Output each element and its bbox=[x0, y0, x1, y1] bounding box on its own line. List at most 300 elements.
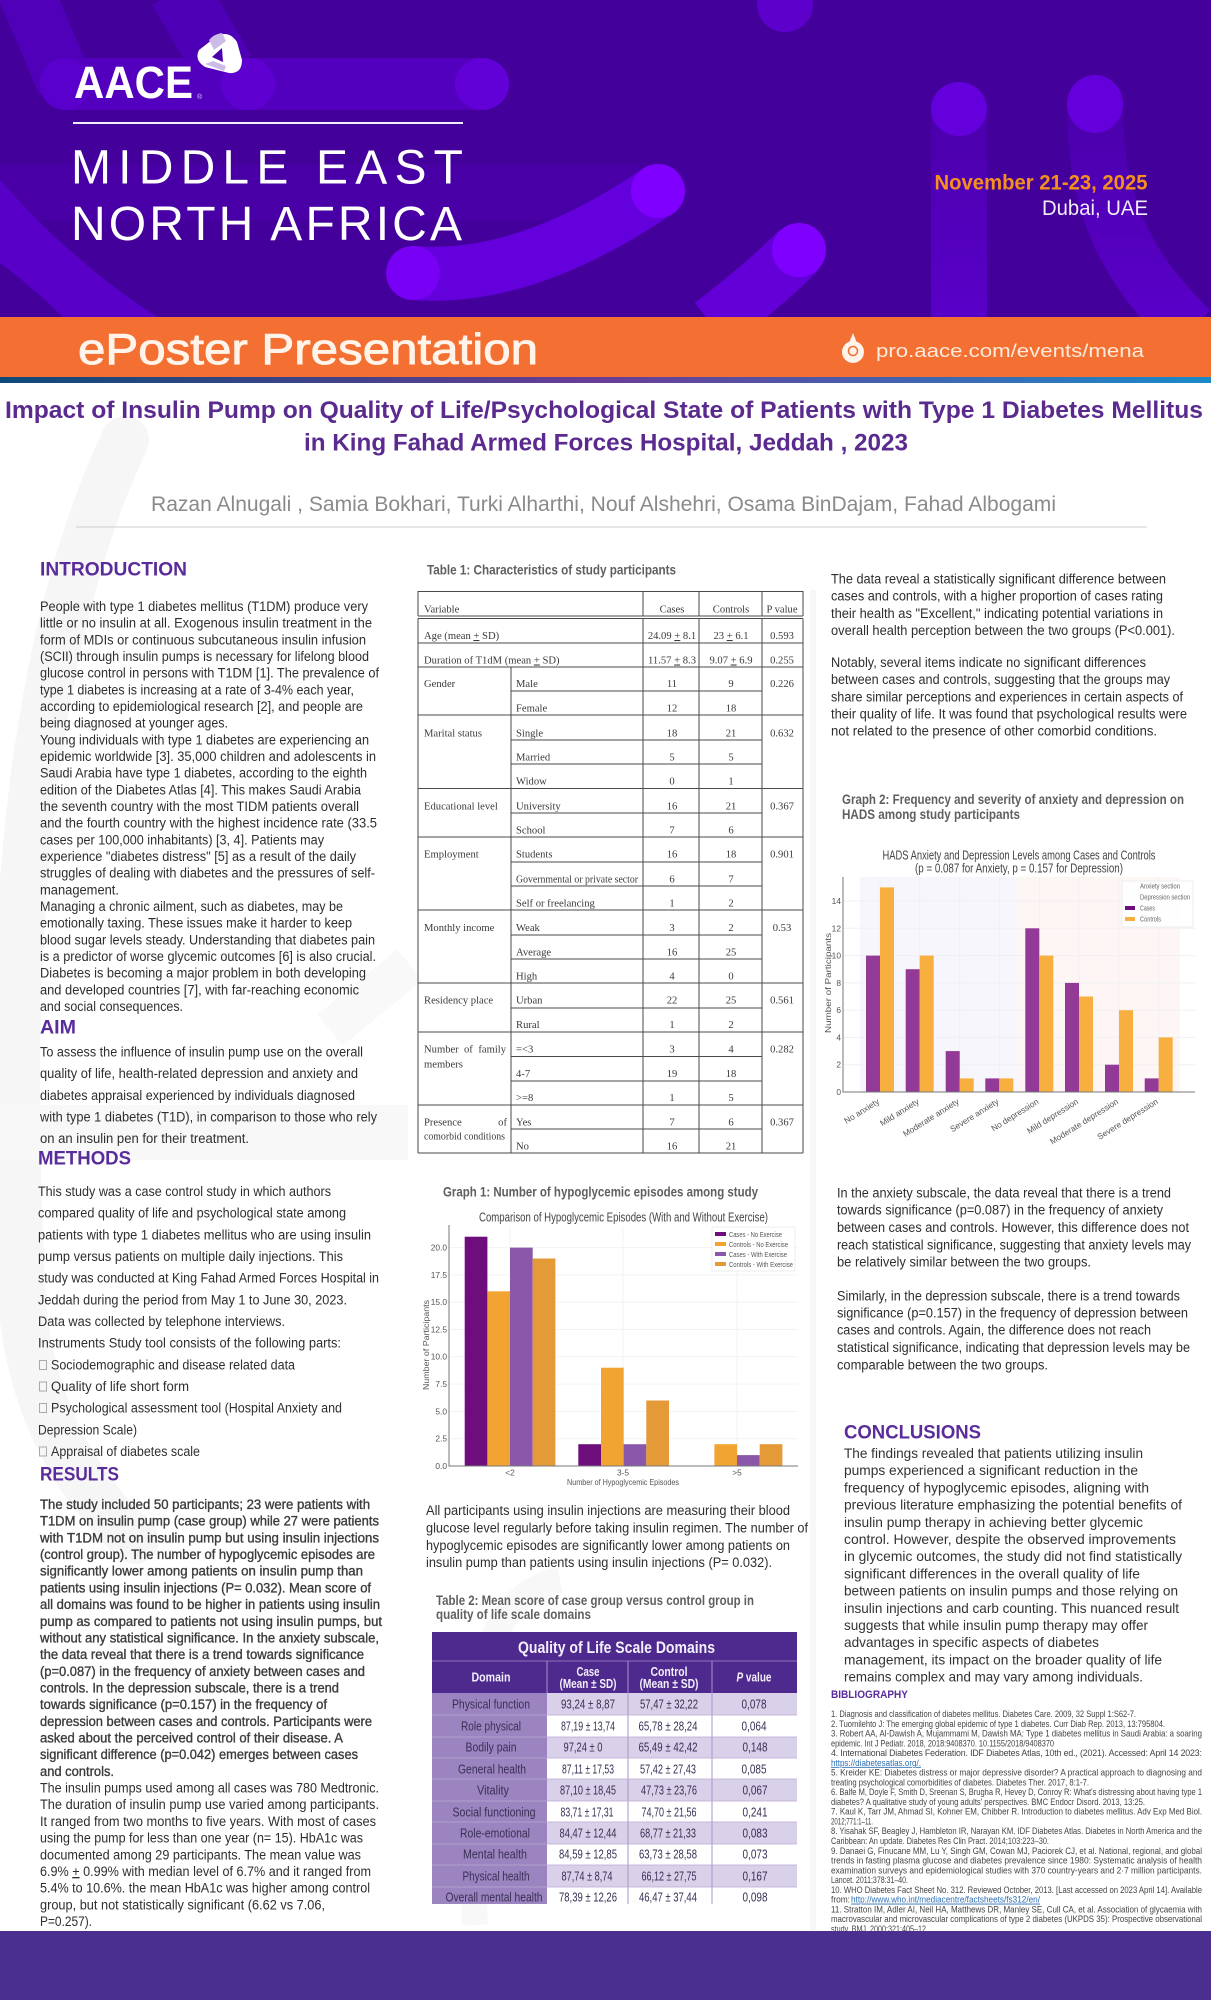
table 1: characteristics of participants: Controls bbox=[713, 604, 749, 616]
text block: references: epidemic. Int J Pediatr. 2018, 2018:9408370. 10.1155/2018/9408370 bbox=[831, 1738, 1054, 1748]
text block: references: from: bbox=[831, 1895, 850, 1905]
table 2: quality of life domains: 66,12 ± 27,75 bbox=[642, 1868, 696, 1884]
table 2: quality of life domains: (Mean ± SD) bbox=[560, 1677, 616, 1691]
table 1: characteristics of participants: 16 bbox=[667, 802, 677, 812]
text block: methods: compared quality of life and psychological state among bbox=[38, 1206, 346, 1221]
text block: results: documented among 29 participants. The mean value was bbox=[40, 1847, 361, 1862]
heading: table 1: Table 1: Characteristics of study participants bbox=[427, 562, 676, 578]
logo: AACE: ® bbox=[197, 93, 203, 101]
bar chart: hypoglycemic episodes: Comparison of Hypoglycemic Episodes (With and Without Exercise) bbox=[479, 1210, 768, 1224]
orange ePoster band: ePoster Presentation bbox=[78, 325, 538, 374]
table 2: quality of life domains: Mental health bbox=[463, 1846, 527, 1862]
background watermark bbox=[0, 440, 816, 1930]
table 1: characteristics of participants: Marital status bbox=[424, 728, 482, 740]
table 1: characteristics of participants: >=8 bbox=[516, 1093, 533, 1104]
table 1: characteristics of participants: Students bbox=[516, 850, 552, 860]
table 1: characteristics of participants: High bbox=[516, 972, 538, 982]
text block: references: http://www.who.int/mediacentre/factsheets/fs312/en/ bbox=[851, 1895, 1041, 1905]
icon: website globe bbox=[842, 333, 864, 363]
table 1: characteristics of participants: 6 bbox=[669, 874, 675, 886]
table 2: quality of life domains: Physical health bbox=[462, 1868, 530, 1884]
text block: conclusions: management, its impact on the broader quality of life bbox=[844, 1652, 1162, 1667]
bar chart: HADS anxiety and depression: Severe anxiety bbox=[948, 1096, 1001, 1134]
text block: references: trends in fasting plasma glucose and diabetes prevalence since 1980: Systematic analysis of health bbox=[831, 1856, 1202, 1866]
text block: conclusions: control. However, despite the observed improvements bbox=[844, 1532, 1176, 1547]
table 1: characteristics of participants: 0.226 bbox=[770, 679, 794, 690]
heading: results: RESULTS bbox=[40, 1464, 119, 1486]
table 1: characteristics of participants: 7 bbox=[669, 1118, 675, 1128]
text block: introduction: little or no insulin at all. Exogenous insulin treatment in the bbox=[40, 616, 372, 631]
table 1: characteristics of participants: =<3 bbox=[516, 1044, 533, 1056]
bar chart: hypoglycemic episodes bbox=[421, 1210, 798, 1487]
table 1: characteristics of participants: Average bbox=[516, 948, 551, 958]
table 2: quality of life domains: Control bbox=[650, 1665, 688, 1679]
table 2: quality of life domains: 83,71 ± 17,31 bbox=[560, 1804, 614, 1820]
heading: aim: AIM bbox=[40, 1018, 76, 1038]
table 2: quality of life domains: 0,064 bbox=[742, 1718, 766, 1734]
chart legend: Controls bbox=[1140, 914, 1161, 924]
text block: introduction: blood sugar levels steady. Understanding that diabetes pain bbox=[40, 932, 375, 947]
website url: pro.aace.com/events/mena bbox=[876, 341, 1145, 361]
bar chart: HADS anxiety and depression: 10 bbox=[832, 951, 841, 961]
table 2: quality of life domains: 87,19 ± 13,74 bbox=[561, 1718, 615, 1734]
table 1: characteristics of participants: 6 bbox=[728, 826, 734, 836]
table 1: characteristics of participants: 0 bbox=[669, 776, 675, 788]
bar chart: hypoglycemic episodes: 10.0 bbox=[431, 1352, 447, 1362]
table 1: characteristics of participants: School bbox=[516, 826, 545, 836]
text block: anxiety and depression findings: reach statistical significance, suggesting that anxiety levels may bbox=[837, 1238, 1191, 1252]
table 1: characteristics of participants: 4 bbox=[669, 972, 675, 982]
poster title bbox=[5, 397, 1203, 456]
chart legend: Depression section bbox=[1140, 892, 1190, 902]
table 2: quality of life domains: 0,167 bbox=[742, 1868, 768, 1884]
text block: introduction: Managing a chronic ailment, such as diabetes, may be bbox=[40, 899, 343, 914]
text block: conclusions: suggests that while insulin pump therapy may offer bbox=[844, 1618, 1148, 1633]
orange ePoster band bbox=[0, 317, 1211, 377]
text block: results: without any statistical significance. In the anxiety subscale, bbox=[39, 1630, 379, 1645]
bar chart: hypoglycemic episodes: 20.0 bbox=[431, 1242, 447, 1252]
table 1: characteristics of participants: Single bbox=[516, 728, 543, 740]
table 1: characteristics of participants: of bbox=[464, 1044, 473, 1056]
text block: hypoglycemia finding: glucose level regularly before taking insulin regimen. The number of bbox=[426, 1520, 808, 1536]
text block: introduction: and developed countries [7], with far-reaching economic bbox=[40, 982, 359, 997]
text block: hypoglycemia finding: hypoglycemic episodes are significantly lower among patients on bbox=[426, 1538, 790, 1553]
table 2: quality of life domains: Social functioning bbox=[452, 1804, 536, 1820]
bar chart: hypoglycemic episodes: 7.5 bbox=[435, 1379, 447, 1389]
bar chart: hypoglycemic episodes: Number of Participants bbox=[421, 1300, 431, 1390]
event date and place: November 21-23, 2025 bbox=[934, 170, 1148, 194]
table 1: characteristics of participants: 5 bbox=[728, 752, 734, 764]
text block: introduction: type 1 diabetes is increasing at a rate of 3-4% each year, bbox=[40, 682, 354, 697]
chart legend: Cases bbox=[1140, 904, 1155, 912]
table 1: characteristics of participants: 7 bbox=[728, 874, 734, 886]
table 1: characteristics of participants: 0 bbox=[728, 972, 734, 982]
divider under authors bbox=[76, 526, 1147, 528]
table 1: characteristics of participants: family bbox=[478, 1044, 507, 1056]
text block: results: The insulin pumps used among all cases was 780 Medtronic. bbox=[40, 1781, 379, 1796]
poster title: Impact of Insulin Pump on Quality of Life/Psychological State of Patients with Type 1 Diabetes Mellitus bbox=[5, 397, 1203, 424]
table 1: characteristics of participants: 0.901 bbox=[770, 850, 794, 860]
text block: anxiety and depression findings: In the anxiety subscale, the data reveal that there is a trend bbox=[837, 1186, 1171, 1200]
text block: introduction: Young individuals with type 1 diabetes are experiencing an bbox=[40, 732, 369, 747]
table 1: characteristics of participants: 18 bbox=[726, 850, 736, 860]
table 1: characteristics of participants: No bbox=[516, 1142, 529, 1152]
table 2: quality of life domains: Domain bbox=[472, 1670, 510, 1684]
heading: table 2: Table 2: Mean score of case group versus control group in bbox=[436, 1593, 754, 1608]
text block: results: T1DM on insulin pump (case group) while 27 were patients bbox=[40, 1514, 379, 1529]
text block: results: towards significance (p=0.157) in the frequency of bbox=[40, 1697, 327, 1712]
text block: results: (p=0.087) in the frequency of anxiety between cases and bbox=[40, 1664, 365, 1679]
table 2: quality of life domains: 65,78 ± 28,24 bbox=[638, 1718, 698, 1734]
table 2: quality of life domains: 65,49 ± 42,42 bbox=[638, 1740, 698, 1754]
text block: aim: quality of life, health-related depression and anxiety and bbox=[40, 1066, 358, 1081]
text block: introduction: and social consequences. bbox=[40, 999, 183, 1014]
table 1: characteristics of participants: Monthly income bbox=[424, 923, 495, 934]
table 1: characteristics of participants: 21 bbox=[726, 728, 736, 740]
heading: graph 2 bbox=[842, 792, 1184, 822]
logo: AACE bbox=[74, 33, 242, 108]
text block: overall health findings: share similar perceptions and experiences in certain aspects of bbox=[831, 690, 1183, 704]
table 1: characteristics of participants: 5 bbox=[669, 752, 675, 764]
table 1: characteristics of participants: Married bbox=[516, 752, 551, 764]
text block: aim: with type 1 diabetes (T1D), in comparison to those who rely bbox=[39, 1110, 377, 1124]
table 1: characteristics of participants: Female bbox=[516, 704, 547, 714]
event date and place: Dubai, UAE bbox=[1042, 196, 1148, 220]
bar chart: hypoglycemic episodes: 5.0 bbox=[435, 1406, 447, 1416]
table 2: quality of life domains: 46,47 ± 37,44 bbox=[639, 1890, 697, 1904]
chart legend: Anxiety section bbox=[1140, 882, 1180, 890]
poster title: in King Fahad Armed Forces Hospital, Jeddah , 2023 bbox=[304, 430, 908, 456]
text block: results: with T1DM not on insulin pump but using insulin injections bbox=[39, 1530, 379, 1545]
gradient strip bbox=[0, 377, 1211, 383]
table 1: characteristics of participants: Educational level bbox=[424, 802, 498, 812]
table 2: quality of life domains: 78,39 ± 12,26 bbox=[559, 1890, 617, 1904]
table 2: quality of life domains: 84,59 ± 12,85 bbox=[559, 1846, 617, 1862]
table 2: quality of life domains: 0,085 bbox=[742, 1762, 766, 1776]
text block: introduction: epidemic worldwide [3]. 35,000 children and adolescents in bbox=[40, 749, 376, 764]
bar chart: hypoglycemic episodes: 15.0 bbox=[431, 1297, 447, 1307]
bar chart: HADS anxiety and depression: Number of Participants bbox=[823, 933, 833, 1033]
text block: introduction: the seventh country with the most TIDM patients overall bbox=[40, 799, 359, 814]
bar chart: HADS anxiety and depression: Moderate anxiety bbox=[901, 1096, 961, 1139]
text block: results: patients using insulin injections (P= 0.032). Mean score of bbox=[40, 1580, 371, 1595]
table 1: characteristics of participants: of bbox=[498, 1118, 507, 1128]
table 1: characteristics of participants: 7 bbox=[669, 826, 675, 836]
table 2: quality of life domains: 74,70 ± 21,56 bbox=[642, 1804, 696, 1820]
text block: results: using the pump for less than one year (n= 15). HbA1c was bbox=[40, 1831, 363, 1846]
table 1: characteristics of participants: 18 bbox=[667, 728, 677, 740]
text block: references: treating psychological comorbidities of diabetes. Diabetes Ther. 2017, 8:1-7. bbox=[831, 1777, 1089, 1787]
text block: introduction: struggles of dealing with diabetes and the pressures of self- bbox=[40, 866, 375, 881]
text block: conclusions: pumps experienced a significant reduction in the bbox=[844, 1463, 1138, 1478]
text block: overall health findings: not related to the presence of other comorbid conditions. bbox=[831, 724, 1157, 738]
table 1: characteristics of participants: 1 bbox=[669, 1093, 675, 1104]
table 2: quality of life domains: 87,74 ± 8,74 bbox=[562, 1868, 612, 1884]
table 2: quality of life domains: 57,42 ± 27,43 bbox=[640, 1762, 696, 1776]
table 2: quality of life domains: 97,24 ± 0 bbox=[564, 1740, 602, 1754]
text block: references: 1. Diagnosis and classification of diabetes mellitus. Diabetes Care. 2009, 32 Suppl 1:S62-7. bbox=[831, 1709, 1136, 1719]
text block: introduction: experience "diabetes distress" [5] as a result of the daily bbox=[40, 849, 356, 864]
bar chart: HADS anxiety and depression: (p = 0.087 for Anxiety, p = 0.157 for Depression) bbox=[915, 862, 1123, 876]
table 2: quality of life domains: 0,098 bbox=[742, 1890, 768, 1904]
text block: methods: pump versus patients on multiple daily injections. This bbox=[38, 1249, 343, 1264]
text block: conclusions: previous literature emphasizing the potential benefits of bbox=[844, 1498, 1182, 1513]
text block: introduction: and the fourth country with the highest incidence rate (33.5 bbox=[40, 816, 377, 831]
bar chart: HADS anxiety and depression: Mild anxiety bbox=[878, 1096, 921, 1128]
footer band bbox=[0, 1931, 1211, 2000]
text block: anxiety and depression findings: be relatively similar between the two groups. bbox=[837, 1254, 1091, 1270]
chart legend: Controls - With Exercise bbox=[729, 1260, 793, 1269]
table 2: quality of life domains bbox=[432, 1632, 797, 1904]
text block: results: controls. In the depression subscale, there is a trend bbox=[40, 1680, 339, 1696]
text block: overall health findings: their health as "Excellent," indicating potential variations in bbox=[831, 606, 1163, 621]
table 1: characteristics of participants: 9.07 + 6.9 bbox=[709, 656, 753, 666]
table 1: characteristics of participants: 9 bbox=[728, 679, 734, 690]
table 1: characteristics of participants: 12 bbox=[667, 704, 677, 714]
text block: methods: Depression Scale) bbox=[38, 1422, 137, 1437]
text block: overall health findings bbox=[831, 572, 1187, 738]
heading: table 2 bbox=[436, 1593, 754, 1622]
table 2: quality of life domains: General health bbox=[458, 1762, 526, 1776]
text block: anxiety and depression findings: significance (p=0.157) in the frequency of depression between bbox=[837, 1306, 1188, 1320]
table 2: quality of life domains: Role-emotional bbox=[460, 1826, 530, 1840]
bar chart: HADS anxiety and depression: No anxiety bbox=[842, 1096, 882, 1126]
table 2: quality of life domains: Quality of Life Scale Domains bbox=[518, 1638, 715, 1657]
bar chart: HADS anxiety and depression: 4 bbox=[836, 1032, 841, 1042]
table 1: characteristics of participants: 0.593 bbox=[770, 631, 794, 642]
text block: results: depression between cases and controls. Participants were bbox=[40, 1714, 372, 1729]
chart legend bbox=[712, 1227, 795, 1271]
text block: results: asked about the perceived control of their disease. A bbox=[40, 1730, 343, 1746]
table 1: characteristics of participants: Gender bbox=[424, 679, 456, 690]
table 2: quality of life domains: 87,10 ± 18,45 bbox=[560, 1782, 616, 1798]
text block: overall health findings: Notably, several items indicate no significant differences bbox=[831, 655, 1146, 670]
table 2: quality of life domains: 0,078 bbox=[742, 1696, 766, 1712]
text block: methods: Instruments Study tool consists of the following parts: bbox=[38, 1336, 341, 1351]
table 2: quality of life domains: 63,73 ± 28,58 bbox=[639, 1846, 697, 1862]
table 1: characteristics of participants: 4-7 bbox=[516, 1069, 530, 1080]
table 1: characteristics of participants: 19 bbox=[667, 1069, 677, 1080]
text block: references: Lancet. 2011;378:31–40. bbox=[831, 1875, 908, 1885]
text block: results: significantly lower among patients on insulin pump than bbox=[40, 1564, 363, 1579]
table 1: characteristics of participants: 0.255 bbox=[770, 656, 794, 666]
text block: anxiety and depression findings: towards significance (p=0.087) in the frequency of anxiety bbox=[837, 1203, 1163, 1218]
text block: results: significant difference (p=0.042) emerges between cases bbox=[40, 1747, 358, 1762]
text block: methods: patients with type 1 diabetes mellitus who are using insulin bbox=[38, 1227, 371, 1242]
text block: conclusions: significant differences in the overall quality of life bbox=[844, 1566, 1140, 1581]
text block: introduction: cases per 100,000 inhabitants) [3, 4]. Patients may bbox=[40, 832, 324, 847]
table 2: quality of life domains: 47,73 ± 23,76 bbox=[641, 1782, 697, 1798]
table 1: characteristics of participants: Duration of T1dM (mean + SD) bbox=[424, 656, 560, 666]
table 2: quality of life domains: 0,083 bbox=[742, 1826, 768, 1840]
table 2: quality of life domains: 0,148 bbox=[742, 1740, 768, 1754]
divider line under logo bbox=[73, 122, 463, 124]
table 1: characteristics of participants: 1 bbox=[728, 776, 734, 788]
text block: methods: Sociodemographic and disease related data bbox=[51, 1357, 296, 1372]
text block: introduction: Diabetes is becoming a major problem in both developing bbox=[40, 966, 366, 981]
text block: introduction: emotionally taxing. These issues make it harder to keep bbox=[40, 916, 352, 931]
text block: references: 2. Tuomilehto J: The emerging global epidemic of type 1 diabetes. Curr Diab Rep. 2013, 13:795804. bbox=[831, 1719, 1165, 1729]
table 1: characteristics of participants: 1 bbox=[669, 1020, 675, 1031]
text block: conclusions: frequency of hypoglycemic episodes, aligning with bbox=[844, 1480, 1149, 1495]
table 1: characteristics of participants: Age (mean + SD) bbox=[424, 631, 500, 642]
text block: anxiety and depression findings: between cases and controls. However, this difference does not bbox=[837, 1220, 1189, 1235]
table 1: characteristics of participants: 6 bbox=[728, 1118, 734, 1128]
table 1: characteristics of participants: 21 bbox=[726, 802, 736, 812]
text block: aim: diabetes appraisal experienced by individuals diagnosed bbox=[40, 1088, 355, 1103]
table 2: quality of life domains: Case bbox=[576, 1665, 600, 1679]
text block: methods: study was conducted at King Fahad Armed Forces Hospital in bbox=[38, 1271, 379, 1286]
table 1: characteristics of participants: 18 bbox=[726, 1069, 736, 1080]
text block: references: diabetes? A qualitative study of young adults' perspectives. BMC Endocr Disord. 2013, 13:25. bbox=[831, 1797, 1145, 1807]
bar chart: hypoglycemic episodes: 2.5 bbox=[435, 1434, 447, 1444]
text block: results: The duration of insulin pump use varied among participants. bbox=[40, 1797, 379, 1812]
table 2: quality of life domains: 0,241 bbox=[742, 1804, 768, 1820]
event name bbox=[71, 142, 463, 251]
table 1: characteristics of participants: 3 bbox=[669, 1044, 675, 1056]
table 1: characteristics of participants: 3 bbox=[669, 923, 675, 934]
table 2: quality of life domains: Physical function bbox=[452, 1696, 530, 1712]
table 1: characteristics of participants: 2 bbox=[728, 898, 734, 910]
bar chart: HADS anxiety and depression: 0 bbox=[836, 1087, 841, 1097]
table 1: characteristics of participants: Yes bbox=[516, 1118, 531, 1128]
table 1: characteristics of participants: 25 bbox=[726, 948, 736, 958]
text block: overall health findings: cases and controls, with a higher proportion of cases rating bbox=[831, 589, 1163, 604]
text block: overall health findings: their quality of life. It was found that psychological results were bbox=[831, 706, 1187, 722]
bar chart: HADS anxiety and depression: 2 bbox=[836, 1060, 841, 1070]
table 1: characteristics of participants: Male bbox=[516, 679, 538, 690]
table 1: characteristics of participants: 22 bbox=[667, 996, 677, 1006]
text block: references: 4. International Diabetes Federation. IDF Diabetes Atlas, 10th ed., (2021). Accessed: April 14 2023: bbox=[831, 1748, 1202, 1758]
text block: introduction: form of MDIs or continuous subcutaneous insulin infusion bbox=[40, 632, 366, 647]
text block: anxiety and depression findings: cases and controls. Again, the difference does not reach bbox=[837, 1322, 1151, 1338]
bar chart: hypoglycemic episodes: 0.0 bbox=[435, 1461, 447, 1471]
text block: conclusions: The findings revealed that patients utilizing insulin bbox=[844, 1446, 1143, 1461]
table 1: characteristics of participants: Rural bbox=[516, 1020, 540, 1031]
event date and place bbox=[934, 170, 1148, 220]
text block: overall health findings: The data reveal a statistically significant difference between bbox=[831, 572, 1166, 586]
text block: results: It ranged from two months to five years. With most of cases bbox=[40, 1814, 376, 1829]
bar chart: HADS anxiety and depression: Mild depression bbox=[1025, 1096, 1080, 1136]
table 2: quality of life domains: P value bbox=[736, 1670, 772, 1684]
table 1: characteristics of participants: Urban bbox=[516, 996, 543, 1006]
bar chart: hypoglycemic episodes: >5 bbox=[732, 1468, 742, 1478]
table 1: characteristics of participants: 0.632 bbox=[770, 728, 794, 740]
text block: conclusions: between patients on insulin pumps and those relying on bbox=[844, 1584, 1178, 1599]
text block: introduction: according to epidemiological research [2], and people are bbox=[40, 699, 363, 714]
text block: results: P=0.257). bbox=[40, 1914, 92, 1929]
text block: conclusions: insulin injections and carb counting. This nuanced result bbox=[844, 1601, 1179, 1616]
table 1: characteristics of participants: 21 bbox=[726, 1142, 736, 1152]
table 2: quality of life domains: 0,067 bbox=[742, 1782, 768, 1798]
text block: anxiety and depression findings bbox=[837, 1186, 1191, 1372]
heading: methods: METHODS bbox=[38, 1148, 131, 1170]
table 1: characteristics of participants: Self or freelancing bbox=[516, 898, 596, 910]
text block: results: and controls. bbox=[40, 1764, 114, 1779]
text block: introduction bbox=[40, 599, 379, 1014]
text block: references: study. BMJ. 2000;321:405–12. bbox=[831, 1924, 928, 1934]
text block: hypoglycemia finding: All participants using insulin injections are measuring their blood bbox=[426, 1503, 790, 1518]
chart legend bbox=[1122, 881, 1193, 927]
text block: hypoglycemia finding: insulin pump than patients using insulin injections (P= 0.032). bbox=[426, 1555, 772, 1570]
text block: results: 6.9% + 0.99% with median level of 6.7% and it ranged from bbox=[40, 1864, 371, 1879]
text block: conclusions: advantages in specific aspects of diabetes bbox=[844, 1635, 1099, 1650]
text block: results: all domains was found to be higher in patients using insulin bbox=[40, 1597, 380, 1612]
text block: results: The study included 50 participants; 23 were patients with bbox=[40, 1497, 370, 1512]
text block: references bbox=[831, 1709, 1202, 1934]
table 1: characteristics of participants: Presence bbox=[424, 1118, 462, 1128]
text block: introduction: (SCII) through insulin pumps is necessary for lifelong blood bbox=[40, 649, 369, 664]
table 2: quality of life domains: 84,47 ± 12,44 bbox=[560, 1826, 616, 1840]
heading: introduction: INTRODUCTION bbox=[40, 560, 187, 580]
bar chart: HADS anxiety and depression: 6 bbox=[836, 1005, 841, 1015]
text block: references: Caribbean: An update. Diabetes Res Clin Pract. 2014;103:223–30. bbox=[831, 1836, 1049, 1846]
table 2: quality of life domains: 87,11 ± 17,53 bbox=[562, 1762, 614, 1776]
table 1: characteristics of participants: comorbid conditions bbox=[424, 1132, 505, 1142]
table 2: quality of life domains: Role physical bbox=[461, 1718, 521, 1734]
table 1: characteristics of participants: Number bbox=[424, 1044, 459, 1056]
event name: NORTH AFRICA bbox=[71, 198, 462, 251]
table 1: characteristics of participants: 25 bbox=[726, 996, 736, 1006]
text block: aim: To assess the influence of insulin pump use on the overall bbox=[40, 1044, 363, 1060]
text block: results: 5.4% to 10.6%. the mean HbA1c was higher among control bbox=[40, 1881, 370, 1896]
text block: conclusions: insulin pump therapy in achieving better glycemic bbox=[844, 1515, 1143, 1530]
table 2: quality of life domains: 93,24 ± 8,87 bbox=[561, 1696, 615, 1712]
table 1: characteristics of participants: 24.09 + 8.1 bbox=[648, 631, 696, 642]
table 1: characteristics of participants: 16 bbox=[667, 948, 677, 958]
table 1: characteristics of participants: 0.367 bbox=[770, 802, 794, 812]
table 1: characteristics of participants: 0.561 bbox=[770, 996, 794, 1006]
heading: bibliography: BIBLIOGRAPHY bbox=[831, 1689, 909, 1701]
table 1: characteristics of participants: Cases bbox=[660, 604, 684, 616]
logo: AACE: AACE bbox=[74, 57, 193, 108]
bar chart: HADS anxiety and depression: Severe depression bbox=[1095, 1096, 1160, 1142]
bar chart: HADS anxiety and depression: 14 bbox=[832, 896, 841, 906]
text block: references: examination surveys and epidemiological studies with 370 country-years and 2·7 million participants. bbox=[831, 1865, 1202, 1875]
text block: results bbox=[39, 1497, 382, 1929]
chart legend: Cases - With Exercise bbox=[729, 1250, 787, 1259]
bar chart: hypoglycemic episodes: <2 bbox=[505, 1468, 515, 1478]
text block: hypoglycemia finding bbox=[426, 1503, 808, 1570]
text block: aim bbox=[39, 1044, 377, 1146]
table 1: characteristics of participants: 0.53 bbox=[773, 923, 791, 934]
text block: methods: Psychological assessment tool (Hospital Anxiety and bbox=[51, 1401, 342, 1416]
table 2: quality of life domains: 57,47 ± 32,22 bbox=[640, 1696, 698, 1712]
text block: overall health findings: between cases and controls, suggesting that the groups may bbox=[831, 672, 1170, 687]
text block: introduction: being diagnosed at younger ages. bbox=[40, 716, 228, 731]
chart legend: Cases - No Exercise bbox=[729, 1230, 782, 1239]
table 2: quality of life domains: Vitality bbox=[477, 1782, 510, 1798]
table 1: characteristics of participants: 23 + 6.1 bbox=[713, 631, 749, 642]
text block: anxiety and depression findings: Similarly, in the depression subscale, there is a trend towards bbox=[837, 1288, 1180, 1304]
text block: methods: Data was collected by telephone interviews. bbox=[38, 1314, 285, 1329]
text block: conclusions bbox=[844, 1446, 1182, 1685]
text block: introduction: People with type 1 diabetes mellitus (T1DM) produce very bbox=[40, 599, 368, 614]
heading: graph 1: Graph 1: Number of hypoglycemic episodes among study bbox=[443, 1184, 758, 1200]
table 1: characteristics of participants: 0.282 bbox=[770, 1044, 794, 1056]
text block: methods: Jeddah during the period from May 1 to June 30, 2023. bbox=[38, 1292, 347, 1307]
table 1: characteristics of participants: 18 bbox=[726, 704, 736, 714]
table 1: characteristics of participants: 2 bbox=[728, 923, 734, 934]
text block: methods: Quality of life short form bbox=[51, 1379, 189, 1394]
bar chart: HADS anxiety and depression: No depression bbox=[989, 1096, 1041, 1133]
text block: introduction: edition of the Diabetes Atlas [4]. This makes Saudi Arabia bbox=[40, 782, 362, 797]
bar chart: hypoglycemic episodes: 3-5 bbox=[617, 1468, 629, 1478]
text block: introduction: is a predictor of worse glycemic outcomes [6] is also crucial. bbox=[40, 949, 376, 964]
bar chart: HADS anxiety and depression bbox=[823, 848, 1195, 1146]
table 2: quality of life domains: Overall mental health bbox=[446, 1890, 542, 1904]
table 1: characteristics of participants: University bbox=[516, 802, 561, 812]
